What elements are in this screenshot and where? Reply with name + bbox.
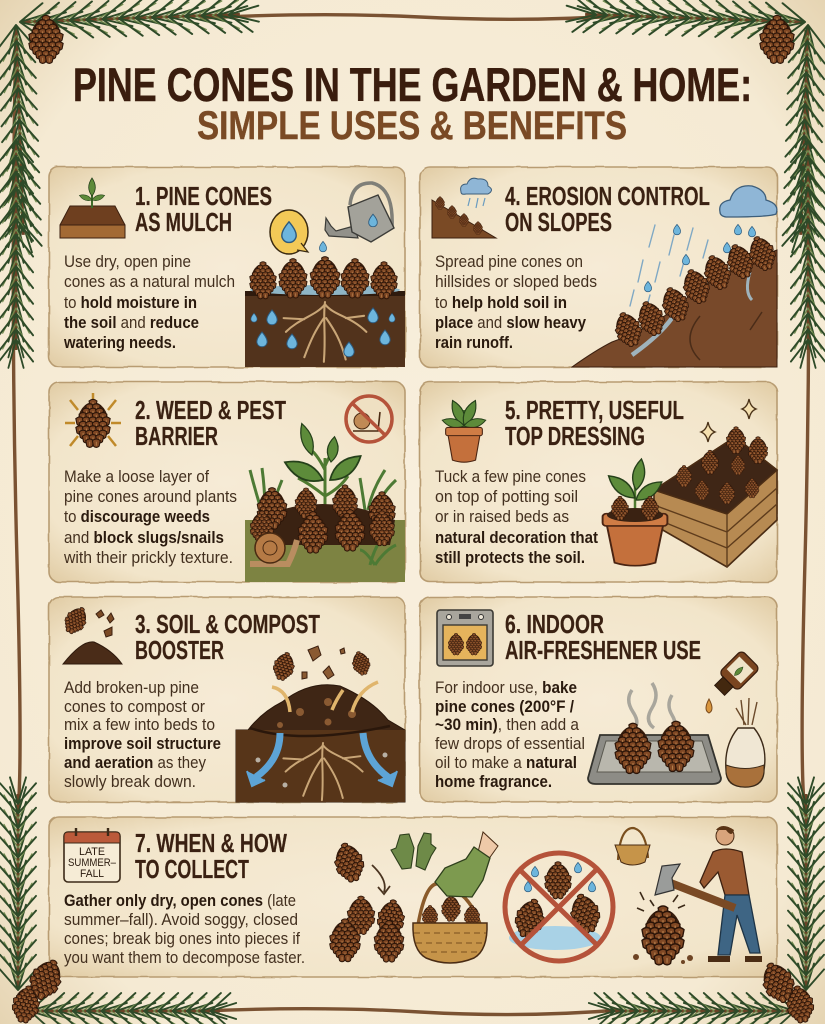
text block: mix a few into beds to — [64, 716, 215, 734]
heading: 6. INDOOR — [505, 611, 604, 639]
steam — [629, 683, 675, 732]
panel: 7 when and how to collect — [49, 817, 777, 977]
gloved hand — [435, 832, 498, 897]
text block: improve soil structure — [64, 735, 221, 753]
corner cones: bottom right — [756, 957, 816, 1024]
text block — [64, 892, 305, 967]
text block — [435, 468, 598, 567]
cone pile — [330, 896, 407, 962]
diffuser — [726, 698, 765, 787]
text block: natural decoration that — [435, 529, 598, 547]
cone being broken — [633, 892, 693, 965]
heading — [505, 611, 701, 665]
heading: BOOSTER — [135, 637, 224, 665]
heading: BARRIER — [135, 423, 218, 451]
text block: Spread pine cones on — [435, 253, 583, 271]
text block: pine cones (200°F / — [435, 698, 574, 716]
text block: cones as a natural mulch — [64, 273, 235, 291]
heading: TO COLLECT — [135, 856, 249, 884]
text block: slowly break down. — [64, 773, 196, 791]
heading: 1. PINE CONES — [135, 183, 272, 211]
text block — [63, 468, 237, 567]
panel: 2 weed and pest barrier — [49, 382, 405, 582]
icon: calendar: FALL — [80, 868, 104, 880]
icon: raised bed with sprout — [60, 178, 125, 238]
basket with cones — [413, 884, 487, 963]
panel: 3 soil and compost booster — [49, 597, 405, 802]
heading — [505, 183, 710, 237]
text block — [435, 253, 597, 352]
branch: bottom right — [788, 777, 824, 990]
icon: essential oil bottle — [706, 650, 760, 713]
icon: calendar: SUMMER– — [68, 857, 117, 869]
text block — [63, 253, 235, 352]
icon: no snails — [346, 396, 392, 442]
heading — [135, 830, 288, 884]
icon: calendar: LATE — [79, 846, 105, 858]
text block: Use dry, open pine — [64, 253, 191, 271]
no soggy cones sign — [505, 853, 613, 961]
text block: to discourage weeds — [64, 508, 210, 526]
panel: 5 top dressing — [420, 382, 777, 582]
corner cones: bottom left — [10, 954, 68, 1024]
snail — [250, 533, 297, 564]
icon: calendar — [64, 828, 120, 882]
icon: oven — [437, 610, 493, 666]
text block: to help hold soil in — [435, 294, 567, 312]
text block: hillsides or sloped beds — [435, 273, 597, 291]
icon: rain cloud — [720, 186, 777, 217]
heading: 7. WHEN & HOW — [135, 830, 288, 858]
text block: rain runoff. — [435, 334, 513, 352]
text block: few drops of essential — [435, 735, 585, 753]
branch: bottom left — [0, 777, 36, 990]
roots — [283, 743, 363, 800]
heading: ON SLOPES — [505, 209, 612, 237]
text block: ~30 min), then add a — [435, 716, 580, 734]
root system — [284, 302, 366, 362]
barrier cones — [250, 485, 395, 553]
icon: slope with cones and cloud — [432, 178, 496, 238]
branch: bottom right horizontal — [589, 993, 795, 1024]
heading — [505, 397, 684, 451]
panel: 6 indoor air-freshener — [420, 597, 777, 802]
icon: watering can — [319, 183, 394, 252]
subtitle: SIMPLE USES & BENEFITS — [197, 104, 627, 148]
compost soil — [236, 685, 405, 802]
heading: 5. PRETTY, USEFUL — [505, 397, 684, 425]
potted plant with cones — [603, 458, 667, 566]
small basket — [615, 828, 650, 865]
heading: TOP DRESSING — [505, 423, 645, 451]
branch: top right — [566, 0, 825, 368]
heading — [135, 397, 286, 451]
text block: oil to make a natural — [435, 754, 577, 772]
text block: and block slugs/snails — [64, 529, 224, 547]
panel: 1 pine cones as mulch — [49, 167, 405, 367]
text block: home fragrance. — [435, 773, 552, 791]
falling arrows — [272, 682, 378, 712]
icon: cone pieces and soil pile — [60, 603, 122, 664]
grass tufts — [250, 468, 396, 565]
text block: watering needs. — [63, 334, 176, 352]
hillside soil — [572, 250, 777, 367]
heading: 3. SOIL & COMPOST — [135, 611, 320, 639]
icon: potted plant — [441, 398, 487, 462]
sparkles — [701, 399, 756, 442]
raised bed — [654, 427, 777, 567]
person with hammer — [655, 826, 762, 962]
text block: summer–fall). Avoid soggy, closed — [64, 911, 298, 929]
heading — [135, 183, 272, 237]
single cone and arrow — [330, 840, 390, 894]
bed cones — [676, 427, 768, 504]
text block: place and slow heavy — [435, 314, 587, 332]
text block: you want them to decompose faster. — [64, 949, 305, 967]
heading: 4. EROSION CONTROL — [505, 183, 710, 211]
heading — [135, 611, 320, 665]
baking tray with cones — [588, 721, 721, 784]
text block: Gather only dry, open cones (late — [64, 892, 296, 910]
branch: top left — [0, 0, 259, 368]
heading: AS MULCH — [135, 209, 232, 237]
plant — [282, 422, 365, 512]
text block — [64, 679, 221, 791]
text block: and aeration as they — [64, 754, 207, 772]
text block: Add broken-up pine — [64, 679, 199, 697]
ground — [245, 520, 405, 582]
text block: with their prickly texture. — [63, 549, 233, 567]
panel: 4 erosion control — [420, 167, 780, 367]
text block: the soil and reduce — [64, 314, 199, 332]
rain — [630, 224, 756, 309]
text block: on top of potting soil — [435, 488, 578, 506]
text block: cones to compost or — [64, 698, 205, 716]
text block: pine cones around plants — [64, 488, 237, 506]
airflow arrows — [247, 733, 397, 786]
water droplets — [251, 308, 395, 357]
text block: Tuck a few pine cones — [435, 468, 586, 486]
gloves — [391, 833, 436, 870]
text block: For indoor use, bake — [435, 679, 577, 697]
text block: cones; break big ones into pieces if — [64, 930, 300, 948]
text block: Make a loose layer of — [64, 468, 209, 486]
text block: still protects the soil. — [435, 549, 585, 567]
slope cones — [610, 233, 780, 350]
falling pieces — [270, 646, 372, 683]
mulch cones — [250, 257, 397, 299]
branch: bottom left horizontal — [30, 993, 236, 1024]
text block: to hold moisture in — [64, 294, 197, 312]
text block: or in raised beds as — [435, 508, 569, 526]
soil cross-section — [245, 285, 405, 367]
heading: AIR-FRESHENER USE — [505, 637, 701, 665]
icon: water bubble — [270, 210, 308, 254]
icon: prickly cone — [65, 393, 121, 447]
heading: 2. WEED & PEST — [135, 397, 286, 425]
text block — [435, 679, 585, 791]
